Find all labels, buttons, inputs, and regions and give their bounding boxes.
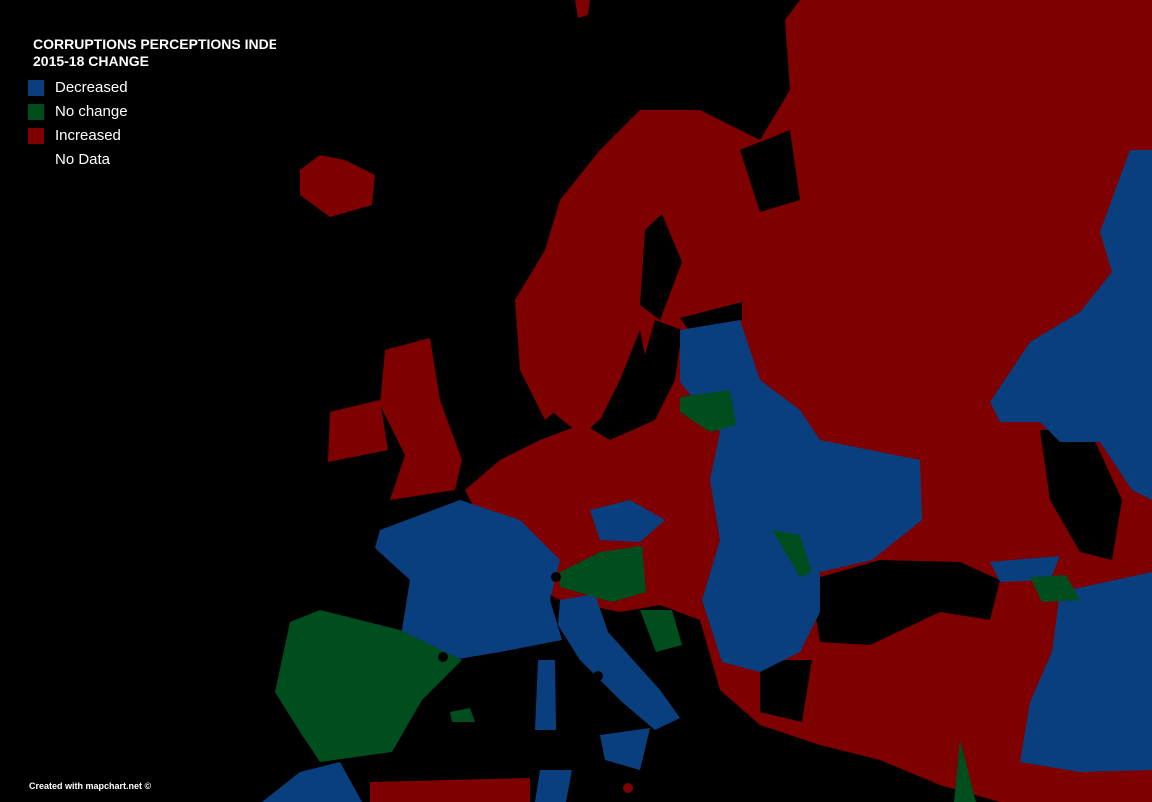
title: 2015-18 CHANGE — [33, 53, 149, 69]
Libya bottom — [370, 778, 530, 802]
region: decreased (blue) — [262, 150, 1152, 802]
legend: increased: Increased — [55, 127, 121, 144]
legend: decreased: Decreased — [55, 79, 128, 96]
footer credit: Created with mapchart.net © — [29, 781, 151, 791]
region: no change (green) — [275, 390, 1080, 802]
Sweden fill — [540, 220, 640, 430]
small black dots — [438, 572, 603, 681]
seas (black) — [590, 130, 1122, 722]
legend: no change: No change — [55, 103, 128, 120]
Ireland — [328, 400, 388, 462]
legend — [28, 79, 128, 168]
legend: no data: No Data — [55, 151, 110, 168]
UK — [380, 338, 462, 500]
Iceland — [300, 155, 375, 217]
region: increased (red base) — [300, 0, 1152, 802]
title — [33, 36, 276, 69]
